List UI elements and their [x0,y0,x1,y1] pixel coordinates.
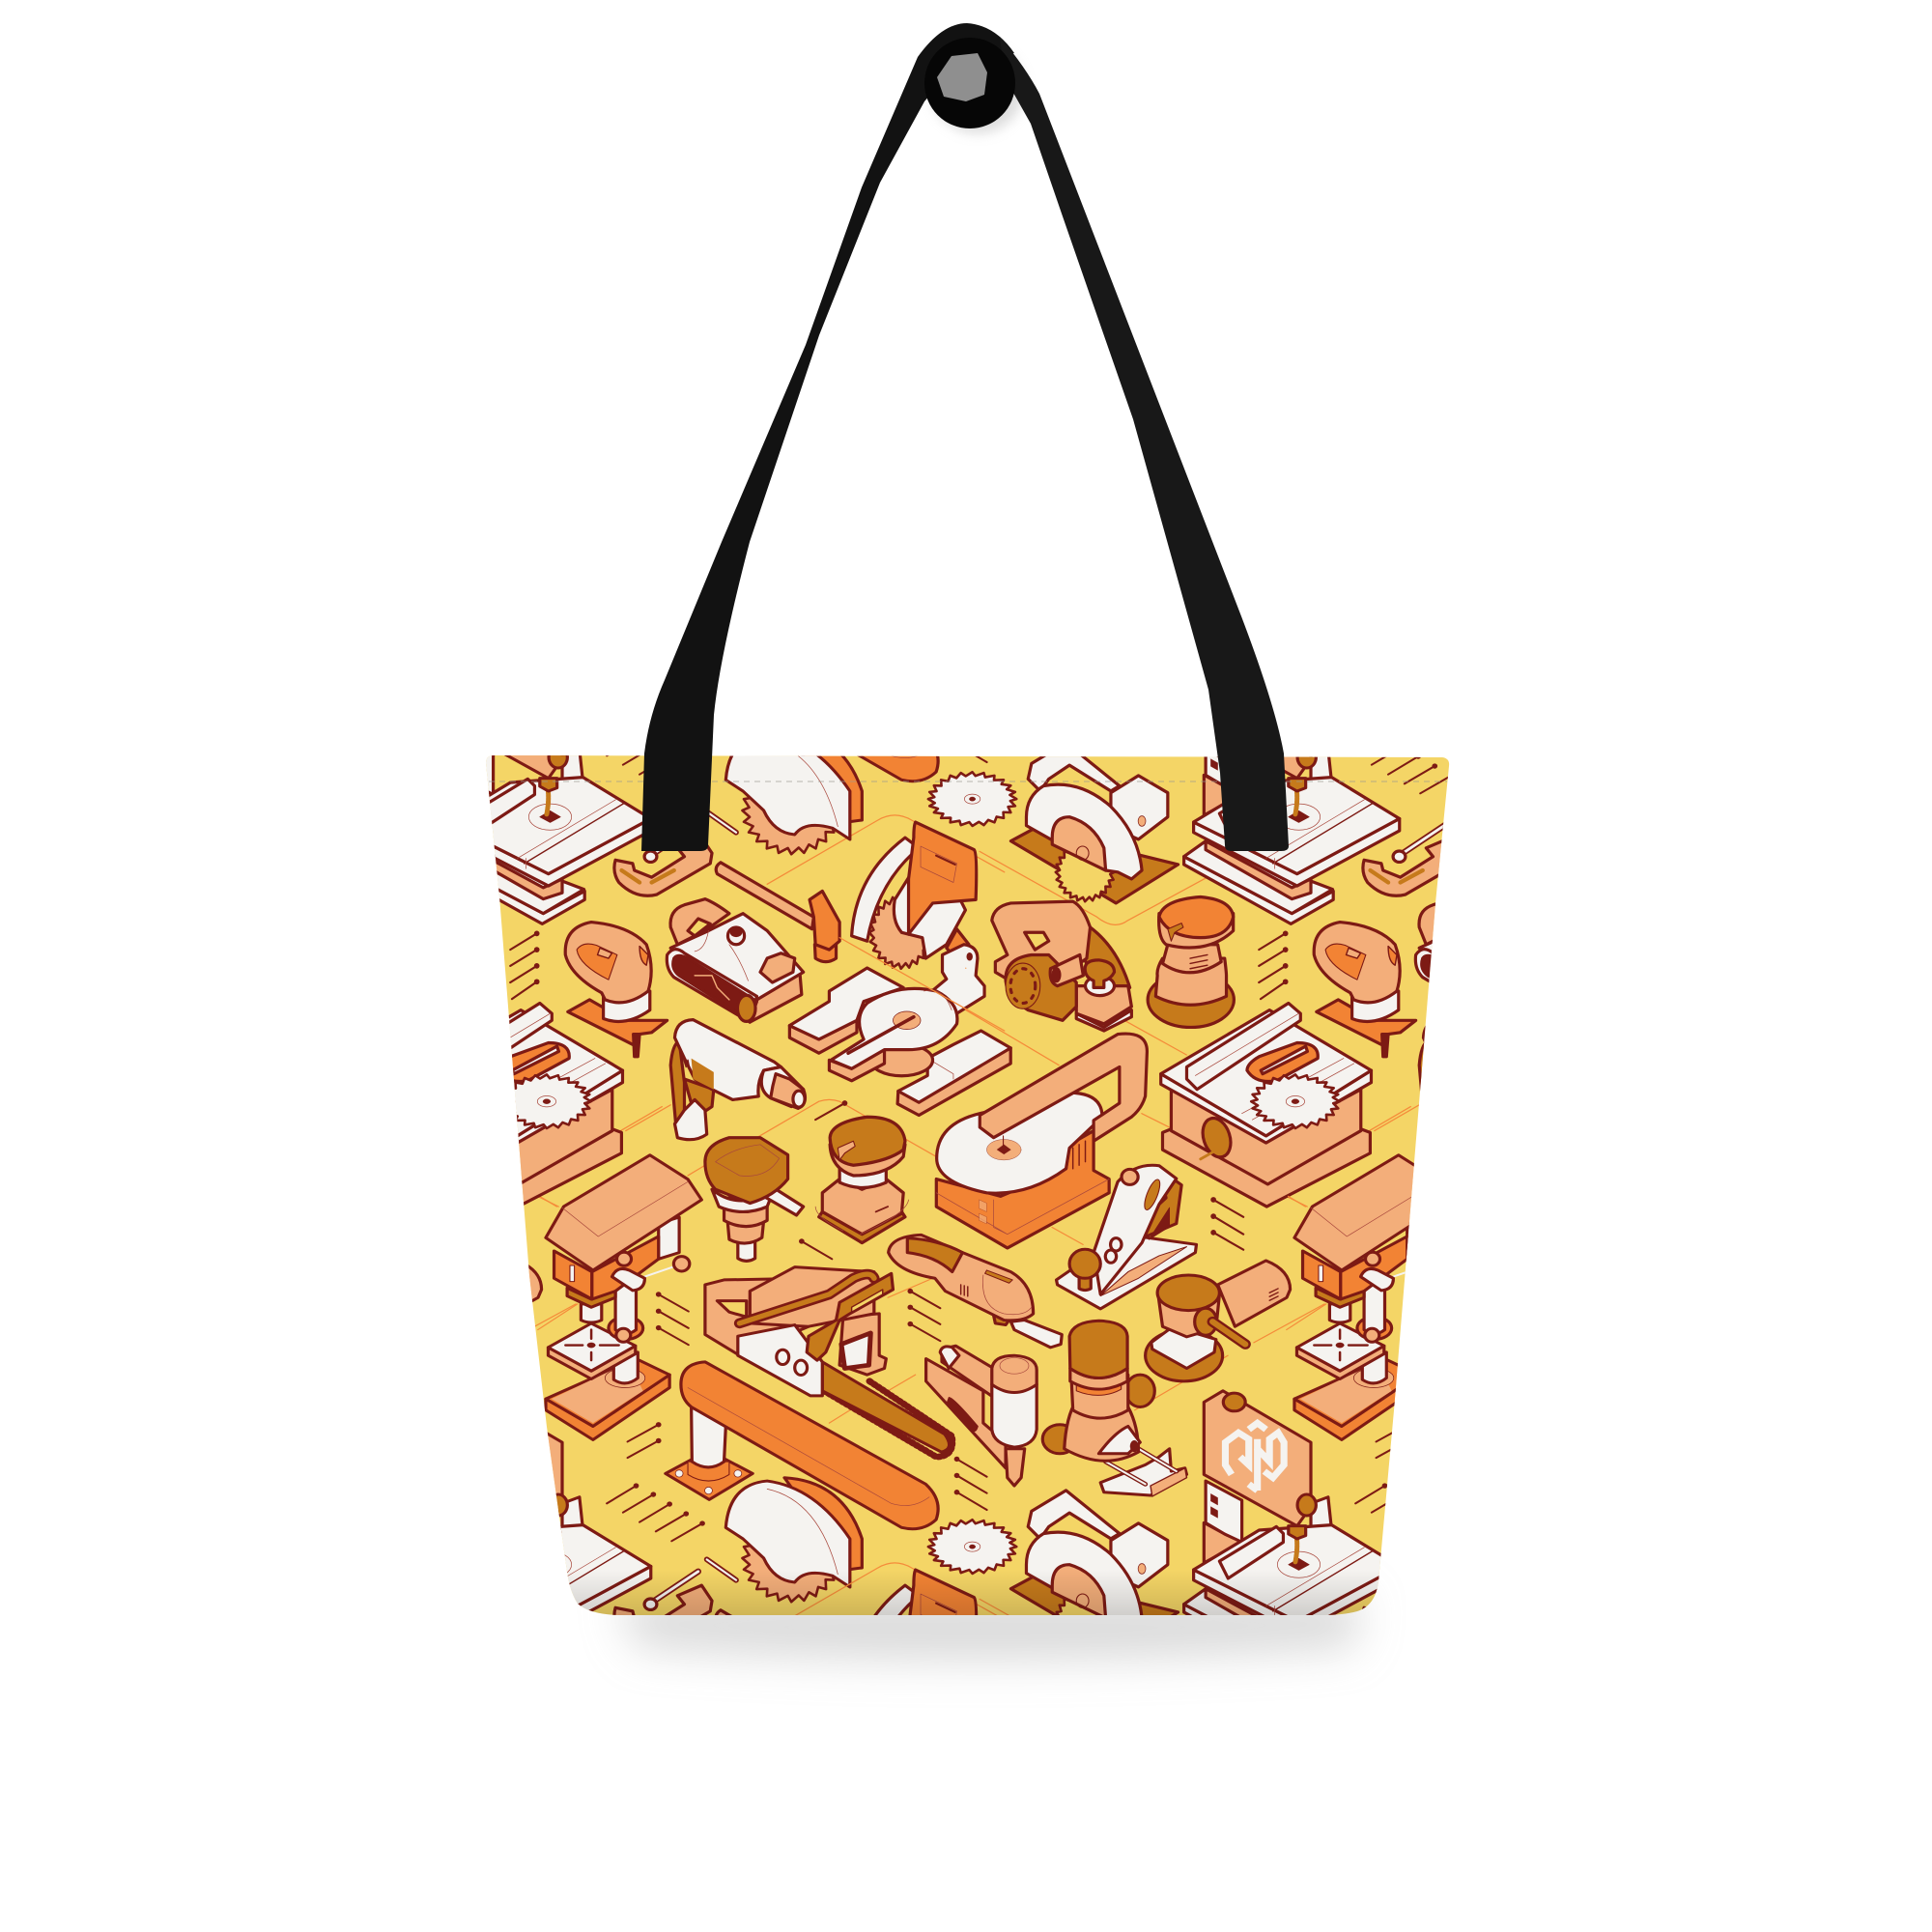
right strap [1000,37,1289,851]
thin orange connector lines, lower [540,938,1410,1244]
thin orange connector lines, bottom [538,1278,1324,1716]
icon: circular saw [1010,743,1179,903]
icon: oscillating multi-tool [889,1235,1062,1348]
icon: random orbit sander with handle [1146,1261,1291,1381]
repeated pattern tiles [486,23,1449,1615]
nails group lower [607,1241,987,1541]
bag drop shadow [618,1599,1362,1660]
icon: jigsaw [565,923,668,1057]
icon: hammer [716,863,839,962]
icon: cut-off saw guard [725,1478,862,1602]
tool pattern, main tile [510,897,1410,1716]
icon: orbital sander [1148,897,1234,1027]
icon: band saw [1184,1391,1400,1671]
tool pattern, upper row of tile [614,743,1208,1115]
icon: floor drill press [546,1155,701,1439]
icon: chainsaw [705,1267,952,1457]
icon: saw blade [928,772,1016,826]
wall pin [924,38,1015,128]
nails group [510,933,1243,1250]
icon: belt sander [667,899,804,1022]
icon: roofing nailer [705,1138,804,1261]
icon: table saw [1161,1003,1371,1207]
icon: power drill [670,1020,805,1140]
icon: square sander [815,1117,909,1243]
icon: miter saw [789,822,1010,1115]
icon: plunge router [1042,1321,1186,1496]
icon: C-clamp [614,811,736,895]
left strap [641,23,1014,851]
icon: scroll saw [936,1034,1147,1248]
icon: pneumatic nailer [926,1346,1037,1486]
stitching line [489,781,1447,782]
wall pin shadow [931,44,1024,133]
icon: orange bench bar [666,1362,938,1529]
tote bag panel [486,755,1449,1615]
bottom fold shading [569,1580,1378,1615]
icon: electric planer [992,901,1131,1031]
thin orange connector lines, upper [767,815,1208,924]
icon: brand logo on band saw [1225,1423,1284,1491]
icon: hand plane [1057,1165,1196,1309]
